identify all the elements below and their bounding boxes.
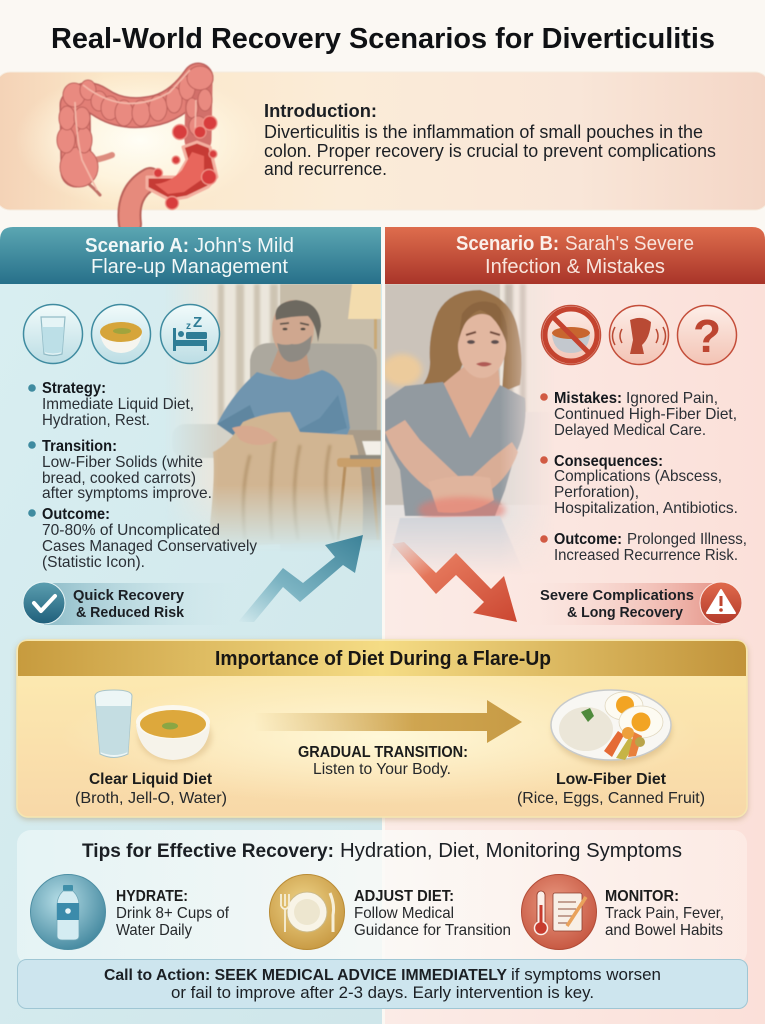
icon: sleeping in bed: z bbox=[186, 321, 191, 332]
diet heading bbox=[18, 641, 746, 676]
badge: quick recovery: & Reduced Risk bbox=[76, 604, 185, 621]
gradual transition text: Listen to Your Body. bbox=[313, 761, 451, 778]
tip: hydrate bbox=[30, 874, 230, 950]
arrow: upward recovery trend bbox=[238, 535, 363, 622]
low-fiber diet: (Rice, Eggs, Canned Fruit) bbox=[517, 790, 705, 807]
tip: monitor: MONITOR: bbox=[605, 888, 679, 905]
bullet: outcome: Outcome: bbox=[554, 531, 622, 548]
icon: water bottle bbox=[30, 874, 106, 950]
intro text: Diverticulitis is the inflammation of small pouches in the bbox=[264, 122, 703, 142]
bullet: consequences: Hospitalization, Antibiotics. bbox=[554, 500, 738, 517]
tip: adjust diet: Follow Medical bbox=[354, 905, 454, 922]
bullet: outcome: Outcome: bbox=[42, 506, 110, 523]
icons: water, broth, rest bbox=[24, 304, 220, 364]
tip: adjust diet bbox=[270, 874, 511, 950]
bullet: consequences: Complications (Abscess, bbox=[554, 468, 722, 485]
panel: importance of diet bbox=[17, 640, 747, 817]
icon: thermometer and notebook bbox=[522, 874, 596, 950]
intro text: Introduction: bbox=[264, 101, 377, 121]
bullet: outcome: Increased Recurrence Risk. bbox=[554, 547, 738, 564]
call to action bbox=[18, 960, 748, 1008]
illustration: Sarah in pain bbox=[385, 284, 539, 564]
tip: monitor bbox=[522, 874, 724, 950]
tip: monitor: Track Pain, Fever, bbox=[605, 905, 724, 922]
bullet: mistakes: Mistakes: bbox=[554, 390, 622, 407]
panel: scenario B bbox=[382, 227, 765, 625]
tip: monitor: and Bowel Habits bbox=[605, 922, 723, 939]
bullet: outcome bbox=[28, 506, 257, 571]
scenario B bullets bbox=[540, 390, 747, 564]
bullet: transition: Low-Fiber Solids (white bbox=[42, 454, 203, 471]
bullet: outcome bbox=[540, 531, 747, 564]
bullet: strategy: Hydration, Rest. bbox=[42, 412, 150, 429]
scenario A header bbox=[0, 227, 381, 284]
bullet: strategy bbox=[28, 380, 194, 429]
icon: glass and broth bowl bbox=[95, 690, 212, 762]
scenario A header: Flare-up Management bbox=[91, 255, 288, 278]
panel: introduction bbox=[0, 66, 765, 224]
badge: severe complications: & Long Recovery bbox=[567, 604, 684, 621]
bullet: strategy: Immediate Liquid Diet, bbox=[42, 396, 194, 413]
scenario B header: Infection & Mistakes bbox=[485, 255, 665, 278]
bullet: mistakes bbox=[540, 390, 737, 439]
icon: sleeping in bed: Z bbox=[193, 314, 202, 331]
intro text: and recurrence. bbox=[264, 159, 387, 179]
arrow: downward complication trend bbox=[392, 542, 517, 622]
tip: hydrate: Drink 8+ Cups of bbox=[116, 905, 230, 922]
call to action: Call to Action: SEEK MEDICAL ADVICE IMMEDIATELY bbox=[104, 967, 507, 984]
bullet: transition: bread, cooked carrots) bbox=[42, 470, 196, 487]
icon: broth bowl bbox=[92, 304, 150, 364]
badge: quick recovery: Quick Recovery bbox=[73, 587, 185, 604]
bullet: transition: Transition: bbox=[42, 438, 117, 455]
icon: sleeping in bed bbox=[160, 304, 220, 364]
intro text bbox=[264, 101, 716, 179]
scenario B header: Sarah's Severe bbox=[565, 232, 694, 255]
bullet: strategy: Strategy: bbox=[42, 380, 106, 397]
icon: plate and cutlery bbox=[270, 874, 344, 950]
icons: mistakes, pain, question bbox=[542, 306, 736, 364]
clear liquid diet: Clear Liquid Diet bbox=[89, 771, 212, 788]
tip: adjust diet: ADJUST DIET: bbox=[354, 888, 454, 905]
scenario B header bbox=[385, 227, 765, 284]
clear liquid diet bbox=[75, 690, 227, 807]
tip: adjust diet: Guidance for Transition bbox=[354, 922, 511, 939]
icon: abdominal pain bbox=[610, 306, 668, 364]
bullet: consequences: Consequences: bbox=[554, 453, 663, 470]
tip: hydrate: HYDRATE: bbox=[116, 888, 188, 905]
title: Real-World Recovery Scenarios for Diverticulitis bbox=[51, 23, 715, 55]
bullet: mistakes: Ignored Pain, bbox=[626, 390, 718, 407]
low-fiber diet: Low-Fiber Diet bbox=[556, 771, 666, 788]
tips heading bbox=[82, 840, 682, 862]
bullet: outcome: 70-80% of Uncomplicated bbox=[42, 522, 220, 539]
tips heading: Hydration, Diet, Monitoring Symptoms bbox=[340, 840, 682, 862]
gradual transition text: GRADUAL TRANSITION: bbox=[298, 744, 468, 761]
icon: glass of water bbox=[24, 304, 82, 364]
panel: recovery tips bbox=[17, 830, 747, 965]
low-fiber diet bbox=[517, 690, 705, 807]
tip: hydrate: Water Daily bbox=[116, 922, 192, 939]
panel: scenario A bbox=[0, 227, 381, 625]
call to action: or fail to improve after 2-3 days. Early intervention is key. bbox=[171, 984, 594, 1002]
clear liquid diet: (Broth, Jell-O, Water) bbox=[75, 790, 227, 807]
icon: colon illustration bbox=[57, 66, 217, 224]
tips heading: Tips for Effective Recovery: bbox=[82, 841, 334, 862]
badge: severe complications: Severe Complications bbox=[540, 587, 694, 604]
bullet: outcome: Prolonged Illness, bbox=[627, 531, 747, 548]
intro text: colon. Proper recovery is crucial to prevent complications bbox=[264, 141, 716, 161]
bullet: outcome: Cases Managed Conservatively bbox=[42, 538, 257, 555]
gradual transition text bbox=[298, 744, 468, 778]
diet heading: Importance of Diet During a Flare-Up bbox=[215, 648, 551, 670]
arrow: gradual transition bbox=[254, 700, 522, 743]
scenario A bullets bbox=[28, 380, 257, 571]
bullet: consequences bbox=[540, 453, 738, 517]
icon: question mark bbox=[678, 306, 736, 364]
icon: no high-fiber cereal bbox=[542, 306, 600, 364]
bullet: mistakes: Delayed Medical Care. bbox=[554, 422, 706, 439]
badge: quick recovery bbox=[23, 582, 240, 625]
bullet: outcome: (Statistic Icon). bbox=[42, 554, 145, 571]
badge: severe complications bbox=[520, 582, 742, 625]
scenario A header: Scenario A: bbox=[85, 234, 189, 257]
scenario A header: John's Mild bbox=[194, 234, 294, 257]
illustration: John resting in recliner bbox=[176, 284, 381, 546]
icon: plate with rice, eggs, fruit bbox=[551, 690, 672, 765]
bullet: transition bbox=[28, 438, 212, 502]
bullet: consequences: Perforation), bbox=[554, 484, 639, 501]
call to action: if symptoms worsen bbox=[511, 966, 661, 984]
icon: question mark: ? bbox=[693, 310, 721, 362]
bullet: mistakes: Continued High-Fiber Diet, bbox=[554, 406, 737, 423]
bullet: transition: after symptoms improve. bbox=[42, 485, 212, 502]
scenario B header: Scenario B: bbox=[456, 232, 559, 255]
